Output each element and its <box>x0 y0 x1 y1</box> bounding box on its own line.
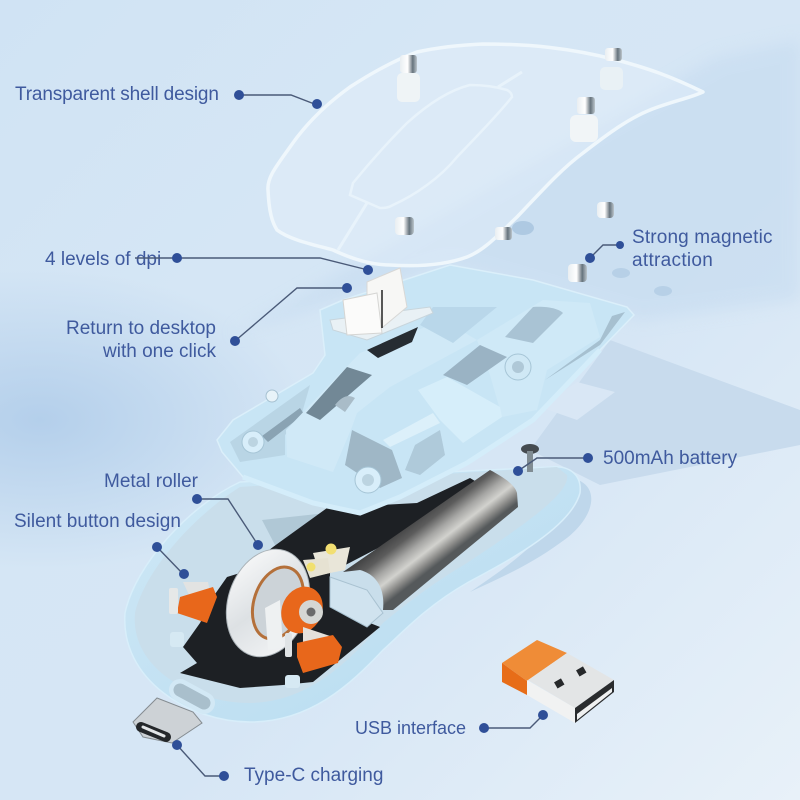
floor shadow <box>530 340 800 485</box>
usb dongle <box>502 640 614 723</box>
posts <box>170 632 184 647</box>
label: strong magnetic attraction: Strong magnetic <box>632 227 773 248</box>
label: 4 levels of dpi: 4 levels of dpi <box>45 249 161 270</box>
label: return to desktop: with one click <box>102 341 216 362</box>
circuit board <box>180 478 490 688</box>
left arch <box>286 320 477 472</box>
cavity <box>135 467 567 703</box>
label: silent button design <box>14 511 189 579</box>
arm <box>383 413 440 447</box>
label: return to desktop <box>66 283 352 362</box>
label: Type-C charging <box>172 740 383 786</box>
battery holder <box>330 577 383 627</box>
label: metal roller: Metal roller <box>104 471 199 492</box>
switch chips <box>313 547 350 575</box>
dpi slot <box>367 327 418 358</box>
right arch <box>477 300 600 417</box>
label: metal roller <box>104 471 263 550</box>
orange wheel <box>274 580 330 640</box>
transparent shell <box>268 44 703 266</box>
top flat <box>420 307 497 343</box>
label: transparent shell design: Transparent shell design <box>15 84 219 105</box>
port slot <box>180 690 204 703</box>
cylinder <box>418 377 502 443</box>
battery <box>343 470 518 610</box>
rim <box>243 350 600 513</box>
screw holes <box>242 431 264 453</box>
left silent button <box>183 582 210 597</box>
label: 4 levels of dpi <box>45 249 373 275</box>
label: Type-C charging: Type-C charging <box>244 765 383 786</box>
magnets <box>395 202 672 296</box>
shell pins <box>400 55 417 73</box>
metal roller <box>213 538 323 668</box>
label: 500mAh battery <box>513 448 738 476</box>
label: strong magnetic attraction: attraction <box>632 250 713 271</box>
label: silent button design: Silent button design <box>14 511 181 532</box>
label: 500mAh battery: 500mAh battery <box>603 448 738 469</box>
middle frame <box>217 265 634 513</box>
label: return to desktop: Return to desktop <box>66 318 216 339</box>
screw <box>521 444 539 472</box>
slot <box>443 345 507 385</box>
right silent button <box>303 627 333 650</box>
bottom shell <box>125 467 580 722</box>
label: strong magnetic attraction <box>585 227 773 271</box>
label: transparent shell design <box>15 84 322 109</box>
dpi buttons <box>330 268 433 340</box>
label: USB interface: USB interface <box>355 718 466 738</box>
frame floor <box>230 385 310 462</box>
label: USB interface <box>355 710 548 738</box>
type-c connector <box>133 698 202 743</box>
